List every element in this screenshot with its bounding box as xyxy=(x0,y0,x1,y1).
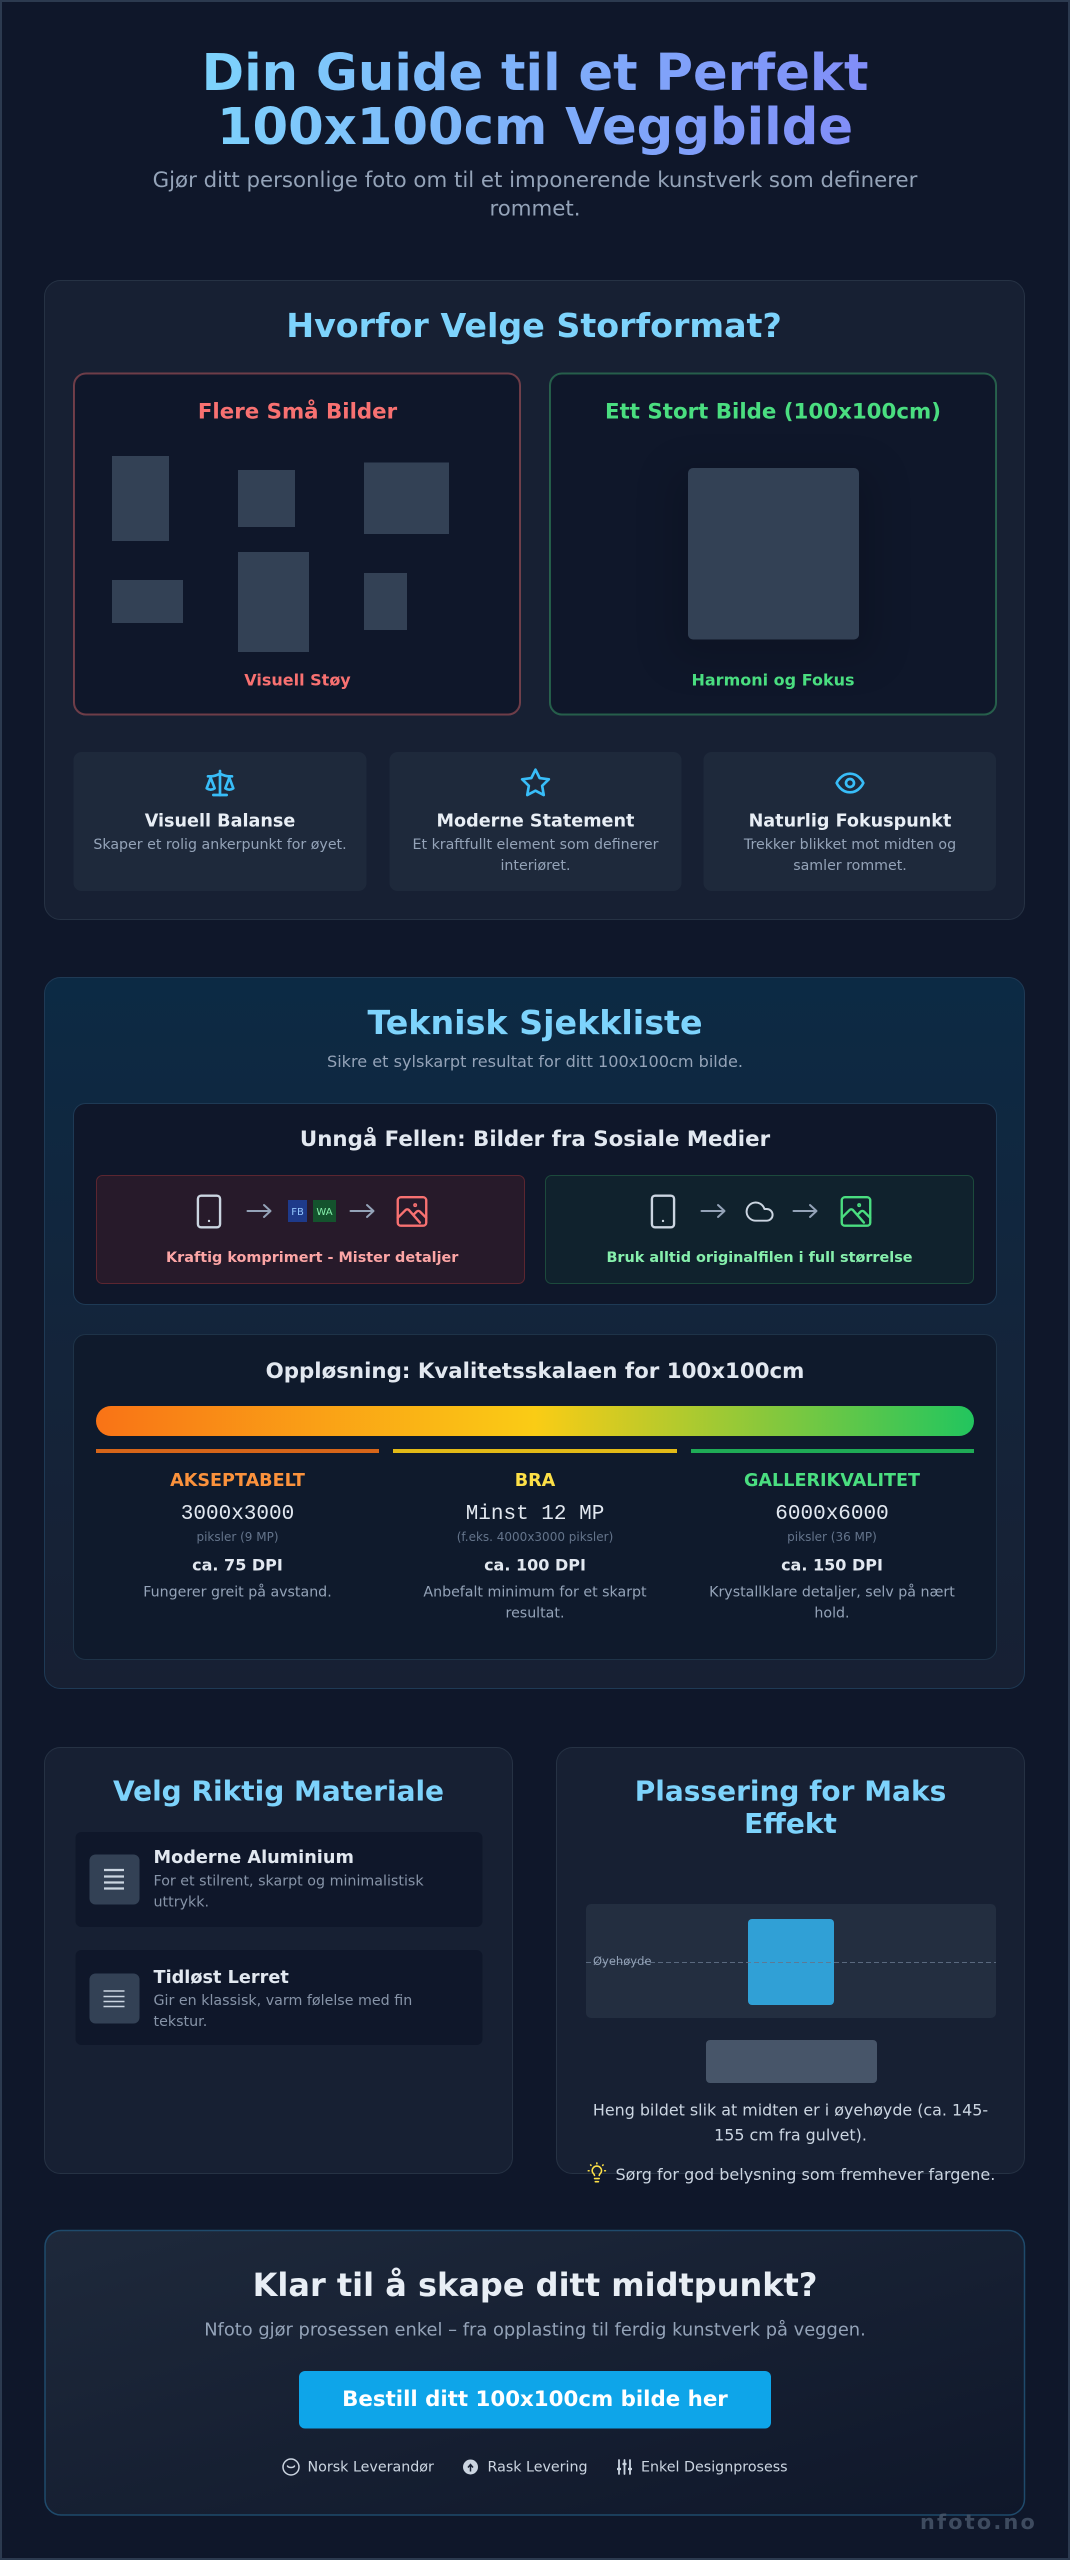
panel: technical checklist xyxy=(44,978,1024,1688)
icon: star xyxy=(522,770,549,795)
card text: Et kraftfullt element som definerer xyxy=(413,837,659,853)
wall diagram xyxy=(586,1904,996,2018)
sofa xyxy=(706,2040,877,2083)
icon: eye xyxy=(837,774,863,792)
badge: simple design process: Enkel Designprosess xyxy=(641,2460,788,2476)
title: Din Guide til et Perfekt xyxy=(202,43,868,103)
heading: resolution scale: Oppløsning: Kvalitetsskalaen for 100x100cm xyxy=(266,1359,804,1384)
icon: canvas xyxy=(90,1974,140,2024)
column: acceptable: Fungerer greit på avstand. xyxy=(143,1584,332,1600)
caption: Bruk alltid originalfilen i full størrelse xyxy=(606,1250,913,1266)
column: acceptable xyxy=(96,1449,379,1600)
heading: many small pictures: Flere Små Bilder xyxy=(198,398,398,424)
column: gallery quality: piksler (36 MP) xyxy=(787,1530,877,1544)
card: visual balance xyxy=(74,752,366,891)
icon: phone xyxy=(652,1196,674,1227)
wall diagram: Øyehøyde xyxy=(593,1954,651,1968)
column: good: Minst 12 MP xyxy=(466,1503,604,1526)
icon: image xyxy=(842,1197,870,1226)
caption: visual noise: Visuell Støy xyxy=(244,670,351,690)
panel: social media trap xyxy=(74,1104,996,1304)
column: good: (f.eks. 4000x3000 piksler) xyxy=(457,1530,613,1544)
icon: image xyxy=(398,1197,426,1226)
icon: aluminium xyxy=(90,1854,140,1904)
text: call to action: Nfoto gjør prosessen enkel – fra opplasting til ferdig kunstverk på veggen. xyxy=(204,2320,866,2340)
heading: social media trap: Unngå Fellen: Bilder fra Sosiale Medier xyxy=(300,1126,771,1152)
section subtitle: Sikre et sylskarpt resultat for ditt 100x100cm bilde. xyxy=(327,1052,743,1071)
heading: one large picture: Ett Stort Bilde (100x100cm) xyxy=(605,400,941,424)
column: gallery quality: Krystallklare detaljer, selv på nært xyxy=(709,1584,955,1600)
subtitle: Gjør ditt personlige foto om til et imponerende kunstverk som definerer xyxy=(153,168,918,193)
icon: cloud xyxy=(747,1202,773,1221)
trust badges xyxy=(283,2459,788,2476)
card text: interiøret. xyxy=(500,858,571,874)
caption xyxy=(593,2100,988,2144)
item: aluminium xyxy=(76,1832,482,1927)
panel: call to action xyxy=(45,2230,1024,2515)
column: acceptable: piksler (9 MP) xyxy=(196,1530,279,1544)
title xyxy=(202,43,868,157)
arrow xyxy=(702,1205,724,1217)
column: gallery quality: ca. 150 DPI xyxy=(781,1556,883,1574)
quality gradient bar xyxy=(96,1406,974,1436)
arrow xyxy=(350,1205,374,1217)
badge: FB xyxy=(288,1200,307,1222)
panel: material xyxy=(44,1748,512,2174)
card text: samler rommet. xyxy=(793,858,907,874)
subtitle: rommet. xyxy=(489,196,581,222)
icon: phone xyxy=(198,1196,220,1227)
bad path box xyxy=(96,1176,524,1284)
panel: why large format xyxy=(44,280,1024,920)
column: acceptable: AKSEPTABELT xyxy=(170,1471,305,1491)
card title: Naturlig Fokuspunkt xyxy=(749,812,951,832)
caption: Kraftig komprimert - Mister detaljer xyxy=(166,1250,459,1266)
item: aluminium: uttrykk. xyxy=(154,1894,209,1910)
heading: placement xyxy=(635,1774,946,1840)
card text: Trekker blikket mot midten og xyxy=(743,837,956,853)
column: good xyxy=(393,1449,677,1622)
column: gallery quality: hold. xyxy=(814,1606,850,1622)
item: canvas: Gir en klassisk, varm følelse med fin xyxy=(154,1993,412,2009)
arrow xyxy=(248,1205,270,1217)
badge: fast delivery: Rask Levering xyxy=(488,2460,588,2476)
item: aluminium: For et stilrent, skarpt og minimalistisk xyxy=(154,1874,424,1890)
card title: Visuell Balanse xyxy=(145,812,295,832)
caption: 155 cm fra gulvet). xyxy=(714,2126,867,2144)
badge: WA: WA xyxy=(316,1207,333,1218)
badge: WA xyxy=(313,1200,336,1222)
column: good: Anbefalt minimum for et skarpt xyxy=(423,1584,647,1600)
column: good: ca. 100 DPI xyxy=(484,1556,586,1574)
column: good: BRA xyxy=(515,1471,556,1491)
item: canvas xyxy=(76,1950,482,2045)
card title: Moderne Statement xyxy=(437,812,634,832)
subtitle xyxy=(153,168,918,222)
item: aluminium: Moderne Aluminium xyxy=(154,1848,354,1868)
icon: scales xyxy=(207,771,233,795)
card text xyxy=(743,837,956,874)
watermark: nfoto.no xyxy=(920,2510,1037,2534)
column: acceptable: 3000x3000 xyxy=(181,1503,294,1526)
panel: placement xyxy=(556,1748,1024,2184)
title: 100x100cm Veggbilde xyxy=(217,97,853,157)
tip with light bulb: Sørg for god belysning som fremhever fargene. xyxy=(616,2165,995,2184)
heading: call to action: Klar til å skape ditt midtpunkt? xyxy=(253,2266,817,2304)
panel: one large picture xyxy=(550,374,996,714)
card: modern statement xyxy=(390,752,682,891)
caption: Heng bildet slik at midten er i øyehøyde (ca. 145- xyxy=(593,2100,988,2120)
column: gallery quality: 6000x6000 xyxy=(775,1503,889,1526)
caption: harmony and focus: Harmoni og Fokus xyxy=(691,670,855,690)
item: canvas: tekstur. xyxy=(154,2014,207,2030)
badge: Norwegian supplier: Norsk Leverandør xyxy=(308,2460,434,2476)
button: Bestill ditt 100x100cm bilde her xyxy=(342,2387,728,2412)
good path box xyxy=(546,1176,974,1284)
heading: placement: Effekt xyxy=(744,1807,837,1840)
heading: technical checklist: Teknisk Sjekkliste xyxy=(367,1003,703,1042)
card text: Skaper et rolig ankerpunkt for øyet. xyxy=(93,837,347,853)
header xyxy=(153,43,918,222)
small picture grid xyxy=(112,456,449,652)
heading: placement: Plassering for Maks xyxy=(635,1774,946,1808)
card: natural focal point xyxy=(704,752,996,891)
panel: resolution scale xyxy=(74,1334,996,1660)
large picture xyxy=(672,468,875,660)
heading: material: Velg Riktig Materiale xyxy=(113,1774,444,1808)
badge: FB: FB xyxy=(291,1207,304,1218)
panel: many small pictures xyxy=(74,374,520,714)
button xyxy=(299,2371,771,2428)
item: canvas: Tidløst Lerret xyxy=(154,1968,289,1988)
card text xyxy=(413,837,659,874)
column: good: resultat. xyxy=(506,1606,564,1622)
heading: why large format: Hvorfor Velge Storformat? xyxy=(286,306,782,345)
column: gallery quality xyxy=(691,1449,974,1622)
column: acceptable: ca. 75 DPI xyxy=(192,1556,283,1574)
arrow xyxy=(794,1205,816,1217)
column: gallery quality: GALLERIKVALITET xyxy=(744,1471,920,1491)
